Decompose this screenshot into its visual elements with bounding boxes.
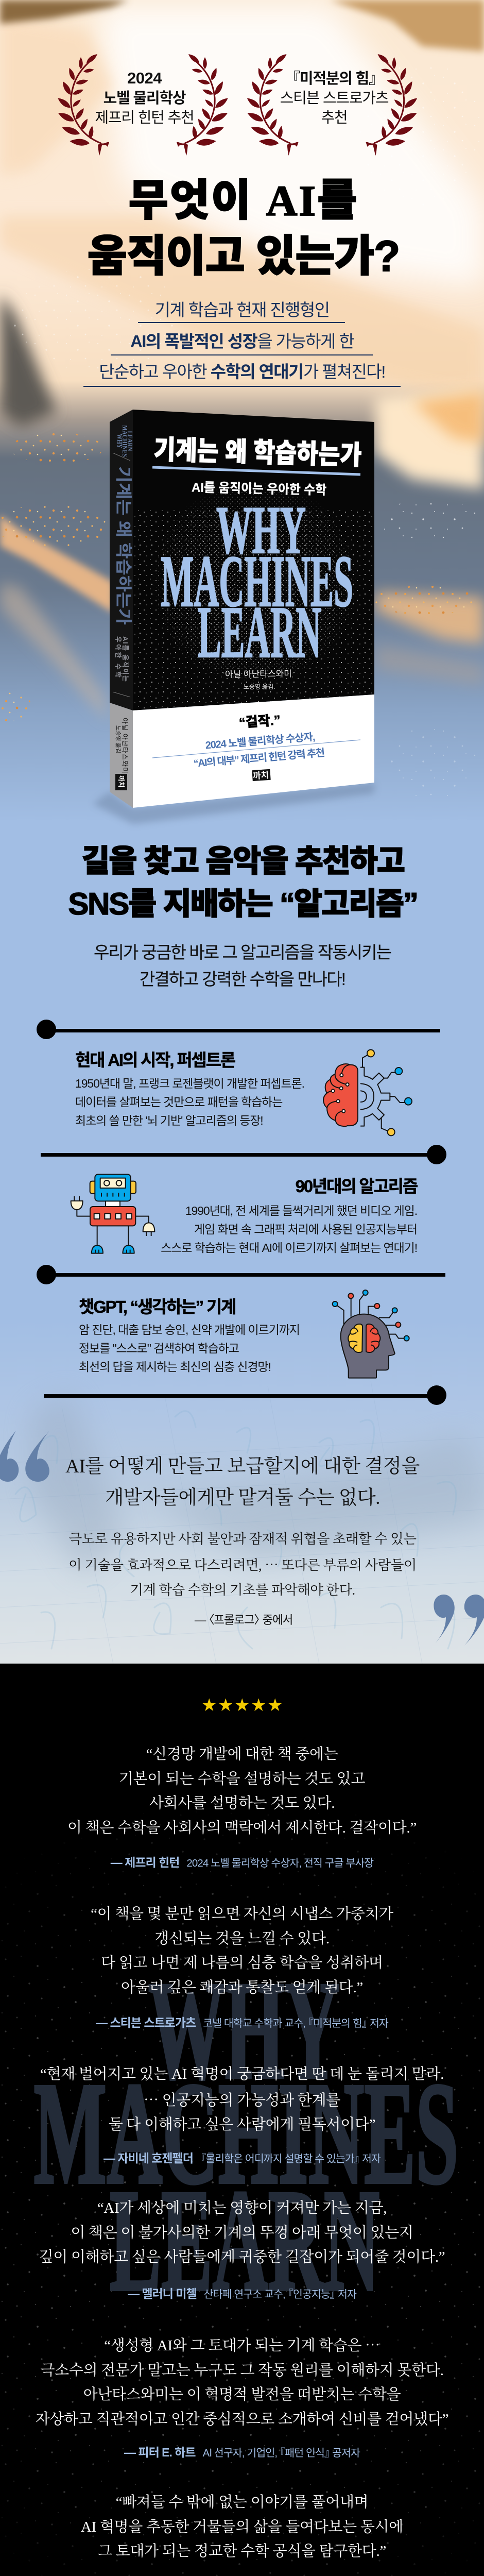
review 1: Geoffrey Hinton: 기본이 되는 수학을 설명하는 것도 있고 xyxy=(119,1770,365,1787)
review 2: Steven Strogatz: “이 책을 몇 분만 읽으면 자신의 시냅스 가중치가 xyxy=(91,1906,393,1922)
card text xyxy=(75,1077,304,1127)
book spine: MACHINES xyxy=(121,425,129,457)
card text: 최초의 쓸 만한 '뇌 기반' 알고리즘의 등장! xyxy=(75,1114,263,1127)
card text: 스스로 학습하는 현대 AI에 이르기까지 살펴보는 연대기! xyxy=(161,1241,417,1255)
book: Why Machines Learn 3D cover xyxy=(110,410,374,808)
laurel badge: Nobel physics prize, Geoffrey Hinton recommendation xyxy=(58,54,228,156)
prologue quote: AI를 어떻게 만들고 보급할지에 대한 결정을 xyxy=(65,1456,420,1477)
quote section background with math notes xyxy=(0,1377,484,1664)
main title: 무엇이 AI를 xyxy=(129,176,358,225)
divider with dot 4 xyxy=(44,1385,446,1405)
review 1: Geoffrey Hinton: 이 책은 수학을 사회사의 맥락에서 제시한다. 걸작이다.” xyxy=(67,1820,417,1836)
review 4: Melanie Mitchell xyxy=(0,2196,484,2270)
section intro text: 간결하고 강력한 수학을 만나다! xyxy=(140,970,345,989)
card text: 1990년대, 전 세계를 들썩거리게 했던 비디오 게임. xyxy=(185,1204,417,1217)
review 6: Björn Ommer xyxy=(0,2490,484,2564)
card text: 1950년대 말, 프랭크 로젠블랫이 개발한 퍼셉트론. xyxy=(75,1077,304,1090)
review 2: Steven Strogatz: 다 읽고 나면 제 나름의 심층 학습을 성취하며 xyxy=(101,1955,383,1971)
laurel badge: The Power of Calculus, Steven Strogatz recommendation xyxy=(247,54,417,156)
book spine: AI를 움직이는 xyxy=(122,636,129,682)
review 6: Björn Ommer: “빠져들 수 밖에 없는 이야기를 풀어내며 xyxy=(116,2494,368,2511)
book front cover: 2024 노벨 물리학상 수상자, xyxy=(205,731,316,751)
icon: robot xyxy=(70,1174,155,1254)
intro line 3: 단순하고 우아한 수학의 연대기가 펼쳐진다! xyxy=(99,362,385,381)
main title xyxy=(88,176,400,280)
attribution 3: — 자비네 호젠펠더『물리학은 어디까지 설명할 수 있는가』 저자 xyxy=(103,2151,381,2165)
prologue quote: 개발자들에게만 맡겨둘 수는 없다. xyxy=(105,1487,380,1509)
book spine: WHY xyxy=(116,434,124,448)
section heading: algorithm: 길을 찾고 음악을 추천하고 xyxy=(81,844,404,878)
section intro text: 우리가 궁금한 바로 그 알고리즘을 작동시키는 xyxy=(94,943,391,962)
black reviews background with Why Machines Learn watermark xyxy=(0,1664,484,2576)
badge text xyxy=(280,71,388,126)
cover English title xyxy=(161,492,353,673)
background: golden light rays fading into blue sky xyxy=(0,0,484,826)
section intro text xyxy=(94,943,391,989)
card title: 90년대의 알고리즘 xyxy=(296,1177,417,1196)
review 5: Peter E. Hart: 극소수의 전문가 말고는 누구도 그 작동 원리를 이해하지 못한다. xyxy=(40,2362,444,2378)
icon: brain and gear xyxy=(323,1049,412,1137)
main title: 움직이고 있는가? xyxy=(88,232,400,280)
prologue quote xyxy=(65,1456,420,1509)
intro text with underlined lines xyxy=(83,300,401,387)
review 1: Geoffrey Hinton xyxy=(67,1746,417,1836)
review 4: Melanie Mitchell: “AI가 세상에 미치는 영향이 커져만 가는 지금, xyxy=(97,2200,387,2216)
prologue body text: 기계 학습 수학의 기초를 파악해야 한다. xyxy=(130,1582,355,1598)
cover subtitle: AI를 움직이는 우아한 수학 xyxy=(192,480,326,498)
book front cover: “AI의 대부” 제프리 힌턴 강력 추천 xyxy=(193,747,325,770)
badge text xyxy=(95,69,194,126)
intro line 1: 기계 학습과 현재 진행형인 xyxy=(154,300,330,319)
panel: deep network xyxy=(79,1290,410,1379)
icon: opening quotation mark xyxy=(0,1431,49,1482)
attribution 1: — 제프리 힌턴 2024 노벨 물리학상 수상자, 전직 구글 부사장 xyxy=(111,1856,373,1869)
review 3: Sabine Hossenfelder xyxy=(0,2062,484,2136)
badge text: 『미적분의 힘』 xyxy=(285,71,383,87)
attribution 2: — 스티븐 스트로가츠 코넬 대학교 수학과 교수, 『미적분의 힘』 저자 xyxy=(96,2016,388,2029)
section heading: algorithm: SNS를 지배하는 “알고리즘” xyxy=(68,887,418,921)
book spine: 기계는 왜 학습하는가 xyxy=(114,466,133,625)
card text xyxy=(161,1204,417,1255)
review 2: Steven Strogatz xyxy=(91,1906,393,1996)
review 5: Peter E. Hart: “생성형 AI와 그 토대가 되는 기계 학습은 … xyxy=(104,2334,380,2355)
review 5: Peter E. Hart: 자상하고 직관적이고 인간 중심적으로 소개하여 신비를 걷어냈다” xyxy=(36,2411,448,2428)
review 1: Geoffrey Hinton: “신경망 개발에 대한 책 중에는 xyxy=(146,1746,338,1762)
review 6: Björn Ommer: 그 토대가 되는 정교한 수학 공식을 탐구한다.” xyxy=(98,2543,386,2560)
prologue source: — 〈프롤로그〉 중에서 xyxy=(195,1614,292,1626)
panel: perceptron xyxy=(75,1049,412,1137)
book spine: 까치 xyxy=(117,775,125,788)
divider with dot 1 xyxy=(37,1020,440,1039)
card text: 게임 화면 속 그래픽 처리에 사용된 인공지능부터 xyxy=(194,1223,417,1236)
book spine: 아닐 아난타스와미 xyxy=(121,718,129,773)
book front cover xyxy=(133,410,374,808)
section heading: algorithm xyxy=(68,844,418,921)
prologue body text xyxy=(68,1531,417,1598)
book spine xyxy=(110,410,134,808)
prologue body text: 이 기술을 효과적으로 다스리려면, … 또다른 부류의 사람들이 xyxy=(68,1554,417,1573)
divider with dot 3 xyxy=(37,1265,445,1284)
attribution 4: — 멜러니 미첼 산타페 연구소 교수, 『인공지능』 저자 xyxy=(128,2287,356,2300)
review 3: Sabine Hossenfelder: “현재 벌어지고 있는 AI 혁명이 궁금하다면 딴 데 눈 돌리지 말라. xyxy=(40,2066,444,2082)
review 3: Sabine Hossenfelder: … 인공지능의 가능성과 한계를 xyxy=(144,2089,340,2109)
card text: 정보를 "스스로" 검색하여 학습하고 xyxy=(79,1342,239,1355)
cover blurb: “걸작.” xyxy=(238,712,281,731)
attribution 5: — 피터 E. 하트 AI 선구자, 기업인, 『패턴 인식』 공저자 xyxy=(124,2446,360,2459)
book spine: 노승영 옮김 xyxy=(115,725,122,753)
five star rating: ★★★★★ xyxy=(201,1695,284,1716)
review 3: Sabine Hossenfelder: 둘 다 이해하고 싶은 사람에게 필독서이다” xyxy=(109,2116,375,2133)
badge text: 2024 xyxy=(127,69,162,87)
icon: head with brain xyxy=(332,1290,410,1379)
review 6: Björn Ommer: AI 혁명을 추동한 거물들의 삶을 들여다보는 동시에 xyxy=(81,2518,403,2535)
book front cover: 노승영 옮김 xyxy=(244,683,273,690)
card text: 데이터를 살펴보는 것만으로 패턴을 학습하는 xyxy=(75,1095,282,1109)
badge text: 노벨 물리학상 xyxy=(103,90,185,107)
panel: 90s algorithm xyxy=(70,1174,418,1255)
icon: closing quotation mark xyxy=(434,1595,484,1646)
cover author: 아닐 아난타스와미 xyxy=(225,669,292,680)
badge text: 스티븐 스트로가츠 xyxy=(280,90,388,107)
card title: 챗GPT, “생각하는” 기계 xyxy=(79,1297,235,1316)
icon: laurel wreath xyxy=(247,54,417,156)
badge text: 추천 xyxy=(321,110,347,126)
review 5: Peter E. Hart xyxy=(0,2332,484,2430)
review 4: Melanie Mitchell: 깊이 이해하고 싶은 사람들에게 귀중한 길잡이가 되어줄 것이다.” xyxy=(39,2249,445,2265)
card text xyxy=(79,1323,300,1374)
icon: laurel wreath xyxy=(58,54,228,156)
intro line 2: AI의 폭발적인 성장을 가능하게 한 xyxy=(130,332,354,351)
card title: 현대 AI의 시작, 퍼셉트론 xyxy=(75,1050,235,1070)
review 4: Melanie Mitchell: 이 책은 이 불가사의한 기계의 뚜껑 아래 무엇이 있는지 xyxy=(71,2225,413,2241)
review 1: Geoffrey Hinton: 사회사를 설명하는 것도 있다. xyxy=(149,1795,335,1811)
book front cover: 까치 xyxy=(252,770,269,781)
review 5: Peter E. Hart: 아난타스와미는 이 혁명적 발전을 떠받치는 수학을 xyxy=(83,2386,401,2403)
card text: 암 진단, 대출 담보 승인, 신약 개발에 이르기까지 xyxy=(79,1323,300,1336)
review 2: Steven Strogatz: 아울러 깊은 쾌감과 통찰도 얻게 된다.” xyxy=(121,1979,363,1996)
badge text: 제프리 힌턴 추천 xyxy=(95,110,194,126)
review 2: Steven Strogatz: 갱신되는 것을 느낄 수 있다. xyxy=(154,1930,330,1946)
prologue body text: 극도로 유용하지만 사회 불안과 잠재적 위협을 초래할 수 있는 xyxy=(69,1531,416,1547)
divider with dot 2 xyxy=(41,1145,446,1164)
book spine: LEARN xyxy=(126,431,134,451)
book spine: 우아한 수학 xyxy=(114,636,122,677)
card text: 최선의 답을 제시하는 최신의 심층 신경망! xyxy=(79,1360,271,1374)
